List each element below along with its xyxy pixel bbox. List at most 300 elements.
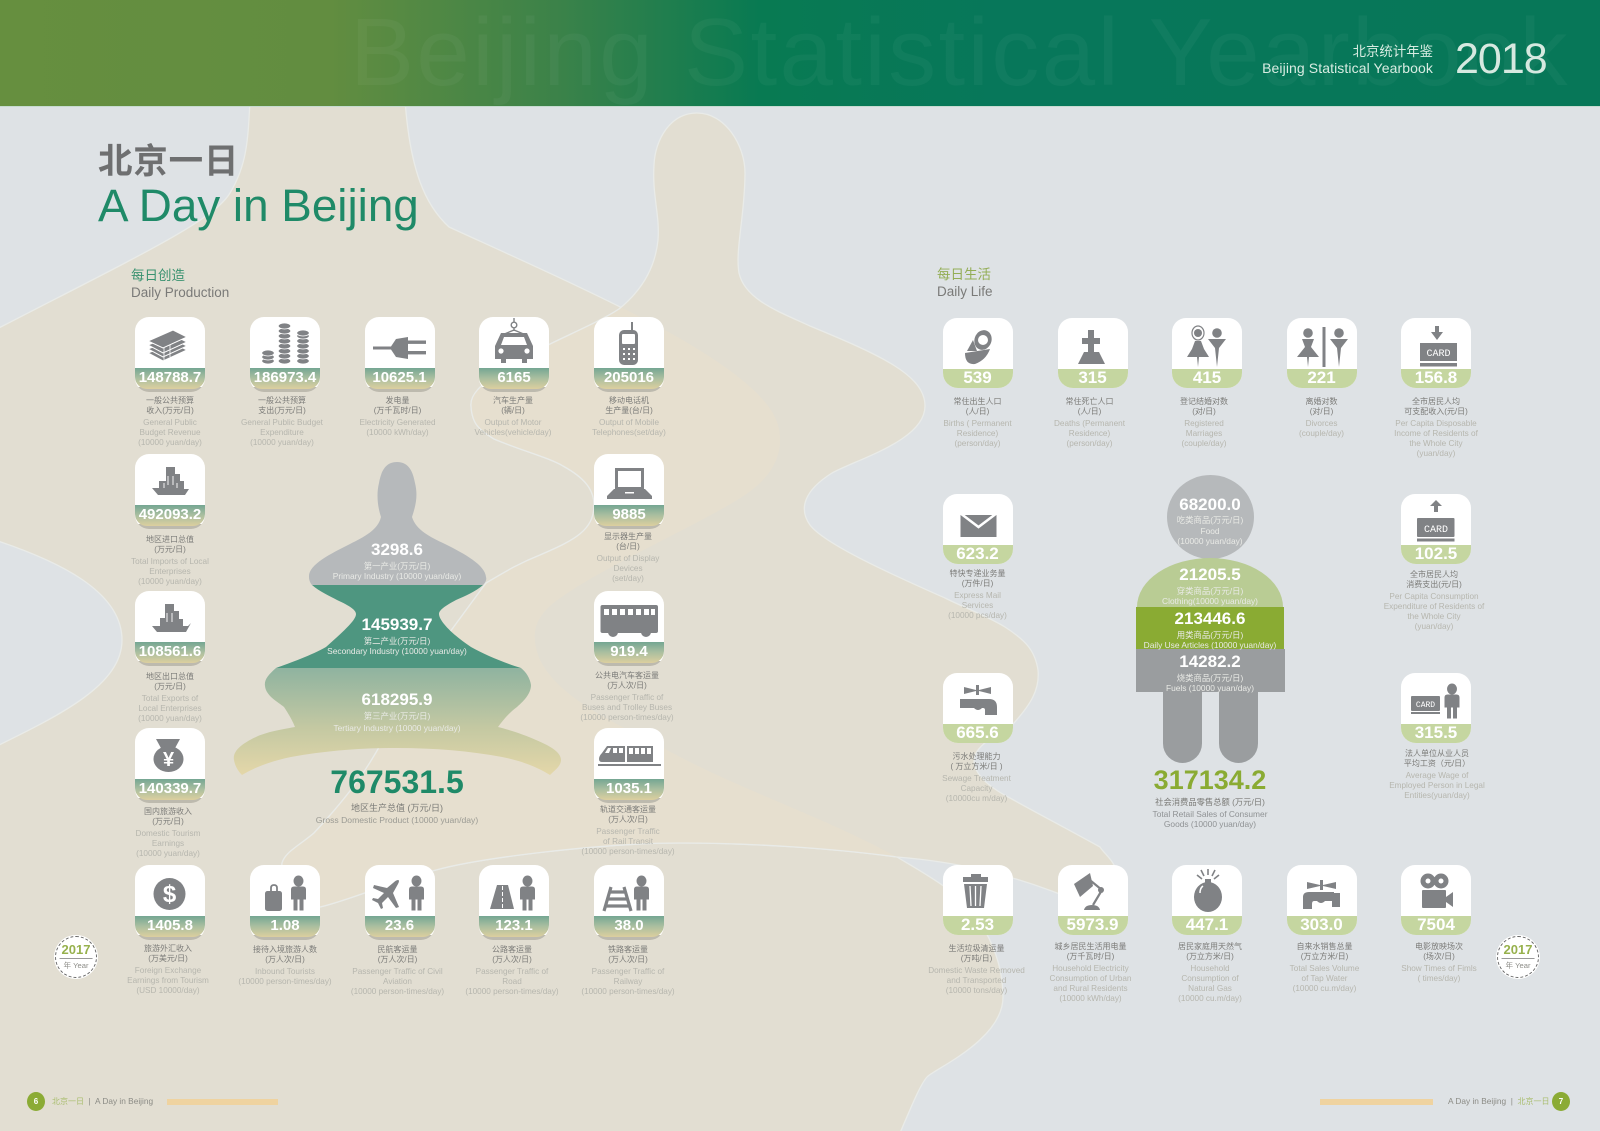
label: (万件/日): [962, 579, 993, 588]
label: Residence): [1069, 429, 1110, 438]
label: [1268, 942, 1382, 994]
label: Domestic Waste Removed: [928, 966, 1025, 975]
label: (台/日): [616, 542, 640, 551]
label: Vehicles(vehicle/day): [475, 428, 551, 437]
label: Passenger Traffic of: [591, 693, 663, 702]
icon: trash bin: [942, 865, 1012, 916]
label: (万立方米/日): [1186, 952, 1234, 961]
icon: water tap: [1286, 865, 1356, 916]
label: 发电量: [386, 396, 410, 405]
card: [594, 454, 664, 529]
metric: output of display devices: [594, 454, 664, 583]
label: (万元/日): [154, 545, 186, 554]
primary/secondary/tertiary industry pagoda chart: [234, 462, 561, 825]
tertiary industry: [333, 691, 461, 734]
label: Passenger Traffic of: [476, 967, 548, 976]
label: (万人次/日): [492, 955, 532, 964]
label: 移动电话机: [609, 396, 649, 405]
icon: plug: [373, 337, 426, 359]
icon: envelope: [942, 494, 1012, 545]
daily use figures: Daily Use Articles (10000 yuan/day): [1144, 640, 1276, 650]
label: (万元/日): [152, 817, 184, 826]
icon: card with down arrow: CARD: [1426, 349, 1451, 360]
value: 108561.6: [139, 643, 201, 660]
metric: general public budget revenue: [135, 317, 205, 447]
value: 205016: [604, 369, 654, 386]
label: Foreign Exchange: [135, 966, 201, 975]
label: 平均工资（元/日）: [1404, 759, 1470, 768]
label: [1377, 570, 1491, 631]
label: (10000 yuan/day): [138, 438, 202, 447]
icon: dollar coin: $: [163, 881, 177, 908]
value: [1286, 369, 1356, 388]
label: [136, 807, 200, 858]
metric: total imports: [131, 454, 209, 586]
label: Average Wage of: [1406, 771, 1468, 780]
label: Domestic Tourism: [136, 829, 200, 838]
label: (person/day): [1067, 439, 1112, 448]
label: Household Electricity: [1052, 964, 1129, 973]
label: (人/日): [966, 407, 989, 416]
metric: divorces: [1264, 318, 1378, 439]
header banner: [0, 0, 1600, 107]
card: [135, 454, 205, 529]
daily use figures: 用类商品(万元/日): [1177, 630, 1243, 640]
label: (10000 cu.m/day): [1178, 994, 1242, 1003]
title chinese: 北京一日: [98, 143, 239, 181]
daily use figures: [1144, 610, 1276, 650]
label: (万人次/日): [608, 955, 648, 964]
label: Expenditure: [260, 428, 304, 437]
icon: desk lamp: [1058, 865, 1128, 916]
card: [594, 728, 664, 803]
card: [1286, 318, 1356, 388]
icon: luggage and person: [250, 865, 320, 916]
total retail sales: Goods (10000 yuan/day): [1164, 819, 1256, 829]
value: 5973.9: [1066, 915, 1118, 934]
label: (万人次/日): [265, 955, 305, 964]
metric: domestic tourism earnings: [135, 728, 205, 858]
icon: water tap: [942, 673, 1012, 724]
daily use figures: 213446.6: [1175, 609, 1245, 628]
label: 污水处理能力: [952, 752, 1000, 761]
card: [135, 591, 205, 666]
value: 1035.1: [606, 780, 652, 797]
value: [594, 916, 664, 936]
metric: household natural gas: [1150, 865, 1264, 1006]
label: Per Capita Consumption: [1389, 592, 1479, 601]
label: [228, 945, 342, 987]
label: Entities(yuan/day): [1404, 791, 1470, 800]
label: Enterprises: [149, 567, 191, 576]
icon: card and person: CARD: [1416, 701, 1435, 710]
label: Output of Mobile: [599, 418, 659, 427]
value: [135, 916, 205, 936]
label: 公路客运量: [492, 945, 532, 954]
footer bar: [167, 1099, 278, 1104]
value: 140339.7: [139, 780, 201, 797]
value: [1172, 916, 1242, 935]
total retail sales: 317134.2: [1154, 765, 1266, 795]
value: 1.08: [270, 917, 300, 934]
icon: swaddled baby: [942, 318, 1012, 369]
icon: car on hook: [495, 318, 533, 363]
label: [592, 396, 666, 437]
value: [1401, 545, 1471, 564]
label: ( times/day): [1418, 974, 1460, 983]
value: [942, 545, 1012, 564]
value: [594, 368, 664, 388]
label: (10000 person-times/day): [465, 987, 559, 996]
label: [340, 945, 454, 997]
card: [135, 865, 205, 940]
torso: fuels: [1136, 649, 1284, 692]
label: Births ( Permanent: [943, 419, 1012, 428]
secondary industry: 第二产业(万元/日): [364, 636, 430, 646]
value: 492093.2: [139, 506, 201, 523]
label: (万吨/日): [961, 954, 992, 963]
metric: railway traffic: [572, 865, 686, 996]
value: [479, 916, 549, 936]
metric: domestic waste: [920, 865, 1034, 996]
value: [942, 724, 1012, 743]
value: [1401, 916, 1471, 935]
badge: 2017 left: [55, 936, 97, 978]
icon: card and person: [1401, 673, 1471, 724]
icon: road and person: [479, 865, 549, 916]
card: [1401, 318, 1471, 388]
metric: general public budget expenditure: [241, 317, 323, 447]
footer bar: [1320, 1099, 1433, 1104]
heading: daily life: [937, 267, 993, 299]
label: Devices: [613, 564, 643, 573]
label: (10000 kWh/day): [1059, 994, 1122, 1003]
value: 10625.1: [372, 369, 427, 386]
label: Consumption of: [1181, 974, 1239, 983]
label: Earnings from Tourism: [127, 976, 209, 985]
value: 315: [1078, 368, 1107, 387]
label: (对/日): [1310, 407, 1333, 416]
label: 汽车生产量: [493, 396, 533, 405]
label: Capacity: [961, 784, 992, 793]
label: (yuan/day): [1415, 622, 1453, 631]
total retail sales: [1153, 764, 1267, 829]
total retail sales: Total Retail Sales of Consumer: [1153, 809, 1267, 819]
label: Electricity Generated: [360, 418, 436, 427]
value: [942, 369, 1012, 388]
value: 23.6: [385, 917, 414, 934]
heading: daily production: 每日创造: [131, 268, 185, 283]
clothing figures: 21205.5: [1179, 565, 1241, 584]
label: (对/日): [1192, 407, 1216, 416]
label: Employed Person in Legal: [1389, 781, 1485, 790]
label: [571, 945, 685, 997]
metric: output of mobile telephones: [592, 317, 666, 437]
icon: separated couple: [1286, 318, 1356, 369]
icon: laptop: [607, 468, 652, 499]
right leg: [1218, 691, 1258, 763]
clothing figures: [1162, 566, 1258, 606]
heading: daily life: Daily Life: [937, 284, 993, 299]
value: 9885: [612, 506, 646, 523]
card: [942, 318, 1012, 388]
label: Road: [502, 977, 522, 986]
card: [942, 673, 1012, 743]
year 2018: 2018: [1455, 35, 1547, 83]
label: Household: [1190, 964, 1230, 973]
icon: money bag: ¥: [163, 749, 175, 771]
header watermark text: Beijing Statistical Yearbook: [350, 0, 1570, 106]
value: [942, 916, 1012, 935]
label: [111, 944, 225, 996]
food figures: [1177, 496, 1243, 546]
icon: dollar coin: [135, 865, 205, 916]
food figures: Food: [1200, 526, 1220, 536]
label: (10000 yuan/day): [250, 438, 314, 447]
value: 6165: [497, 369, 531, 386]
icon: card with down arrow: [1401, 318, 1471, 369]
label: Output of Display: [597, 554, 659, 563]
tertiary industry: Tertiary Industry (10000 yuan/day): [333, 723, 461, 733]
label: (10000 person-times/day): [580, 713, 674, 722]
label: (set/day): [612, 574, 644, 583]
footer text: A Day in Beijing | 北京一日: [1448, 1096, 1550, 1106]
heading: daily life: 每日生活: [937, 267, 991, 282]
value: 415: [1193, 368, 1221, 387]
label: Registered: [1184, 419, 1224, 428]
total gdp: [316, 761, 478, 826]
label: [131, 535, 209, 586]
label: Divorces: [1306, 419, 1337, 428]
label: 自来水销售总量: [1296, 942, 1352, 951]
icon: grave cross: [1058, 318, 1128, 369]
label: [580, 671, 674, 722]
value: [1058, 369, 1128, 388]
value: [1401, 724, 1471, 743]
card: [364, 865, 434, 940]
label: [1382, 942, 1496, 984]
value: [479, 368, 549, 388]
label: [920, 944, 1034, 996]
label: Income of Residents of: [1394, 429, 1478, 438]
label: (10000 person-times/day): [581, 987, 675, 996]
value: 186973.4: [254, 369, 316, 386]
card: [479, 317, 549, 392]
label: (10000 yuan/day): [136, 849, 200, 858]
label: (辆/日): [501, 406, 525, 415]
card: [135, 728, 205, 803]
label: Expenditure of Residents of: [1384, 602, 1484, 611]
card: [1172, 318, 1242, 388]
metric: foreign exchange earnings: [113, 865, 227, 996]
total gdp: 767531.5: [330, 764, 464, 800]
value: 148788.7: [139, 369, 201, 386]
card: [250, 865, 320, 940]
total retail sales: 社会消费品零售总额 (万元/日): [1155, 797, 1265, 807]
label: 地区进口总值: [146, 535, 194, 544]
value: 919.4: [610, 643, 648, 660]
card: [594, 865, 664, 940]
left leg: [1162, 691, 1202, 763]
label: 生产量(台/日): [605, 406, 653, 415]
person-shaped retail sales chart: [1135, 473, 1285, 845]
label: 轨道交通客运量: [600, 805, 656, 814]
label: Total Sales Volume: [1290, 964, 1359, 973]
label: (万立方米/日): [1301, 952, 1348, 961]
label: 支出(万元/日): [258, 406, 306, 415]
label: (10000 cu.m/day): [1293, 984, 1356, 993]
icon: coins: [262, 323, 309, 364]
label: Passenger Traffic of: [592, 967, 664, 976]
footer right: [1320, 1092, 1571, 1111]
label: 显示器生产量: [604, 532, 652, 541]
metric: household electricity: [1036, 865, 1150, 1006]
label: Marriages: [1186, 429, 1222, 438]
food figures: 吃类商品(万元/日): [1177, 515, 1243, 525]
icon: plane and person: [364, 865, 434, 916]
label: (万元/日): [154, 682, 186, 691]
label: [138, 672, 202, 723]
label: 特快专递业务量: [950, 569, 1006, 578]
metric: registered marriages: [1150, 318, 1264, 449]
label: (万千瓦时/日): [1067, 952, 1114, 961]
label: (person/day): [955, 439, 1000, 448]
footer text: 北京一日 | A Day in Beijing: [52, 1096, 153, 1106]
card: [135, 317, 205, 392]
label: 铁路客运量: [608, 945, 648, 954]
label: (10000 person-times/day): [351, 987, 444, 996]
badge year: 2017: [62, 942, 90, 957]
value: 102.5: [1415, 544, 1457, 563]
metric: sewage treatment: [920, 673, 1034, 804]
label: (10000 person-times/day): [581, 847, 675, 856]
total gdp: 地区生产总值 (万元/日): [351, 803, 443, 813]
card: [1058, 318, 1128, 388]
label: [474, 396, 551, 437]
value: 315.5: [1415, 723, 1457, 742]
label: (yuan/day): [1417, 449, 1455, 458]
label: Budget Revenue: [140, 428, 200, 437]
value: 156.8: [1415, 368, 1457, 387]
fuels figures: 14282.2: [1179, 652, 1241, 671]
label: [1147, 397, 1261, 449]
fuels figures: [1166, 653, 1254, 693]
primary industry: Primary Industry (10000 yuan/day): [333, 571, 461, 581]
label: [1380, 749, 1494, 801]
icon: money bag: [154, 739, 184, 772]
value: 447.1: [1186, 915, 1228, 934]
torso: daily use articles: [1136, 607, 1284, 649]
label: General Public Budget: [241, 418, 323, 427]
label: 旅游外汇收入: [144, 944, 192, 953]
label: (万人次/日): [378, 955, 417, 964]
label: (couple/day): [1299, 429, 1344, 438]
value: 303.0: [1300, 915, 1343, 934]
torso: clothing: [1137, 558, 1283, 607]
label: 离婚对数: [1306, 397, 1338, 406]
label: 一般公共预算: [146, 396, 194, 405]
icon: cash stack: [149, 330, 186, 360]
label: 全市居民人均: [1412, 397, 1460, 406]
card: [1286, 865, 1356, 935]
card: [594, 591, 664, 666]
metric: births: [920, 318, 1034, 449]
icon: cargo ship: [152, 467, 189, 495]
pagoda shapes: [234, 462, 561, 775]
label: General Public: [143, 418, 197, 427]
card: [1401, 673, 1471, 743]
tertiary industry: 618295.9: [362, 690, 432, 709]
label: (10000 tons/day): [946, 986, 1007, 995]
value: 221: [1307, 368, 1336, 387]
label: [581, 805, 675, 856]
secondary industry: 145939.7: [362, 615, 432, 634]
clothing figures: Clothing(10000 yuan/day): [1162, 596, 1258, 606]
label: [241, 396, 323, 447]
footer left: [27, 1092, 279, 1111]
label: 电影放映场次: [1415, 942, 1463, 951]
label: [138, 396, 202, 447]
food figures: (10000 yuan/day): [1177, 536, 1243, 546]
page number 6: [27, 1092, 45, 1111]
heading: daily production: [131, 268, 229, 300]
value: 665.6: [956, 723, 999, 742]
label: 生活垃圾清运量: [948, 944, 1004, 953]
card: [1058, 865, 1128, 935]
card: [594, 317, 664, 392]
label: and Rural Residents: [1053, 984, 1128, 993]
label: the Whole City: [1407, 612, 1461, 621]
food figures: 68200.0: [1179, 495, 1241, 514]
label: (万美元/日): [148, 954, 188, 963]
icon: bride and groom: [1172, 318, 1242, 369]
card: [942, 494, 1012, 564]
icon: film camera: [1401, 865, 1471, 916]
clothing figures: 穿类商品(万元/日): [1177, 586, 1243, 596]
label: 全市居民人均: [1410, 570, 1458, 579]
label: Total Imports of Local: [131, 557, 209, 566]
label: [1032, 397, 1146, 449]
page number 6: 6: [34, 1097, 38, 1106]
metric: road traffic: [457, 865, 571, 996]
background: silhouette shapes: [0, 107, 1114, 1131]
label: Residence): [957, 429, 998, 438]
label: Buses and Trolley Buses: [582, 703, 672, 712]
label: Aviation: [383, 977, 412, 986]
label: 常住出生人口: [954, 397, 1002, 406]
label: Passenger Traffic: [596, 827, 660, 836]
value: 123.1: [495, 917, 533, 934]
label: (10000cu m/day): [946, 794, 1007, 803]
label: (USD 10000/day): [136, 986, 200, 995]
label: the Whole City: [1409, 439, 1463, 448]
label: (万人次/日): [608, 815, 648, 824]
label: 消费支出(元/日): [1406, 580, 1462, 589]
badge caption: 年 Year: [1505, 961, 1531, 970]
label: 城乡居民生活用电量: [1054, 942, 1126, 951]
value: [1286, 916, 1356, 935]
value: 623.2: [956, 544, 999, 563]
label: Local Enterprises: [138, 704, 202, 713]
label: (万千瓦时/日): [374, 406, 421, 415]
value: [1401, 369, 1471, 388]
label: Express Mail: [954, 591, 1001, 600]
metric: inbound tourists: [228, 865, 342, 986]
metric: film shows: [1379, 865, 1493, 986]
badge caption: 年 Year: [63, 961, 89, 970]
badge: 2017 right: [1497, 936, 1539, 978]
icon: card with up arrow: CARD: [1424, 525, 1448, 536]
